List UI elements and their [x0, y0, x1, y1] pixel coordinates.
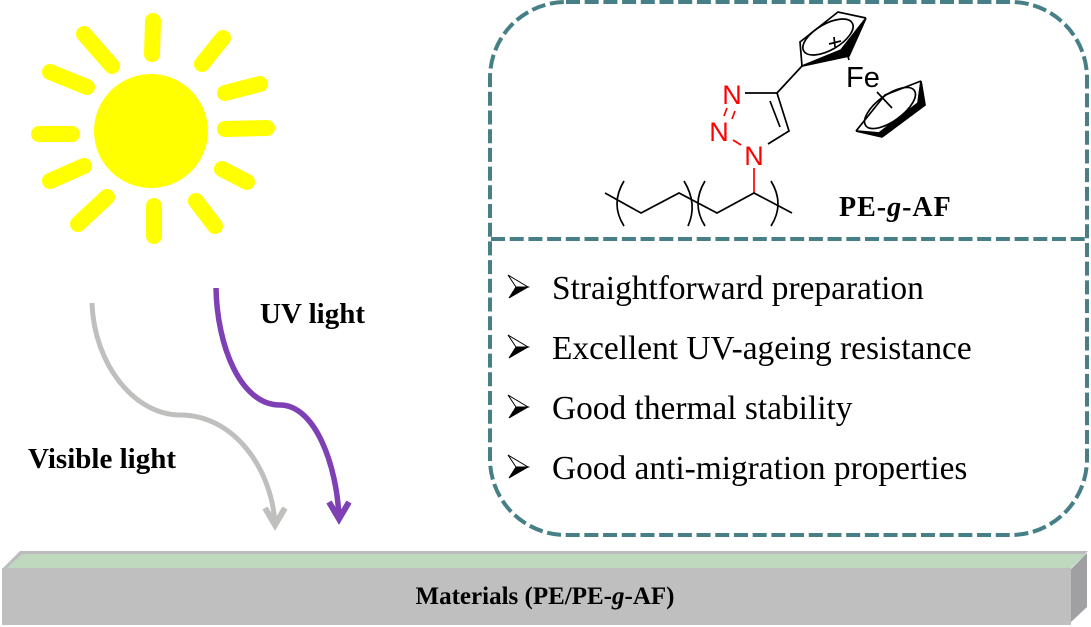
item 4: Good anti-migration properties	[552, 450, 967, 487]
label: visible light: Visible light	[28, 443, 176, 475]
triazole ring	[745, 66, 802, 144]
nitrogen labels: N	[709, 117, 729, 147]
nitrogen labels: N	[744, 141, 764, 171]
label: materials: Materials (PE/PE-g-AF)	[416, 583, 674, 610]
arrow: visible light	[92, 303, 285, 525]
panel: PE-g-AF properties	[490, 2, 1087, 535]
icon: sun	[39, 21, 267, 236]
chemical structure: PE-g-AF	[605, 12, 925, 226]
polymer chain	[605, 181, 792, 226]
ferrocene iron label: Fe	[846, 62, 880, 94]
ferrocene upper ring	[797, 12, 866, 66]
label: PE-g-AF: PE-g-AF	[839, 192, 952, 223]
arrow: UV light	[216, 288, 349, 519]
item 2: Excellent UV-ageing resistance	[552, 330, 972, 367]
nitrogen labels	[709, 80, 764, 171]
item 1: Straightforward preparation	[552, 270, 924, 307]
list: properties	[508, 270, 972, 487]
ferrocene lower ring	[856, 80, 925, 137]
label: UV light: UV light	[260, 298, 365, 330]
nitrogen labels: N	[722, 80, 742, 110]
material slab	[2, 551, 1088, 625]
item 3: Good thermal stability	[552, 390, 853, 427]
